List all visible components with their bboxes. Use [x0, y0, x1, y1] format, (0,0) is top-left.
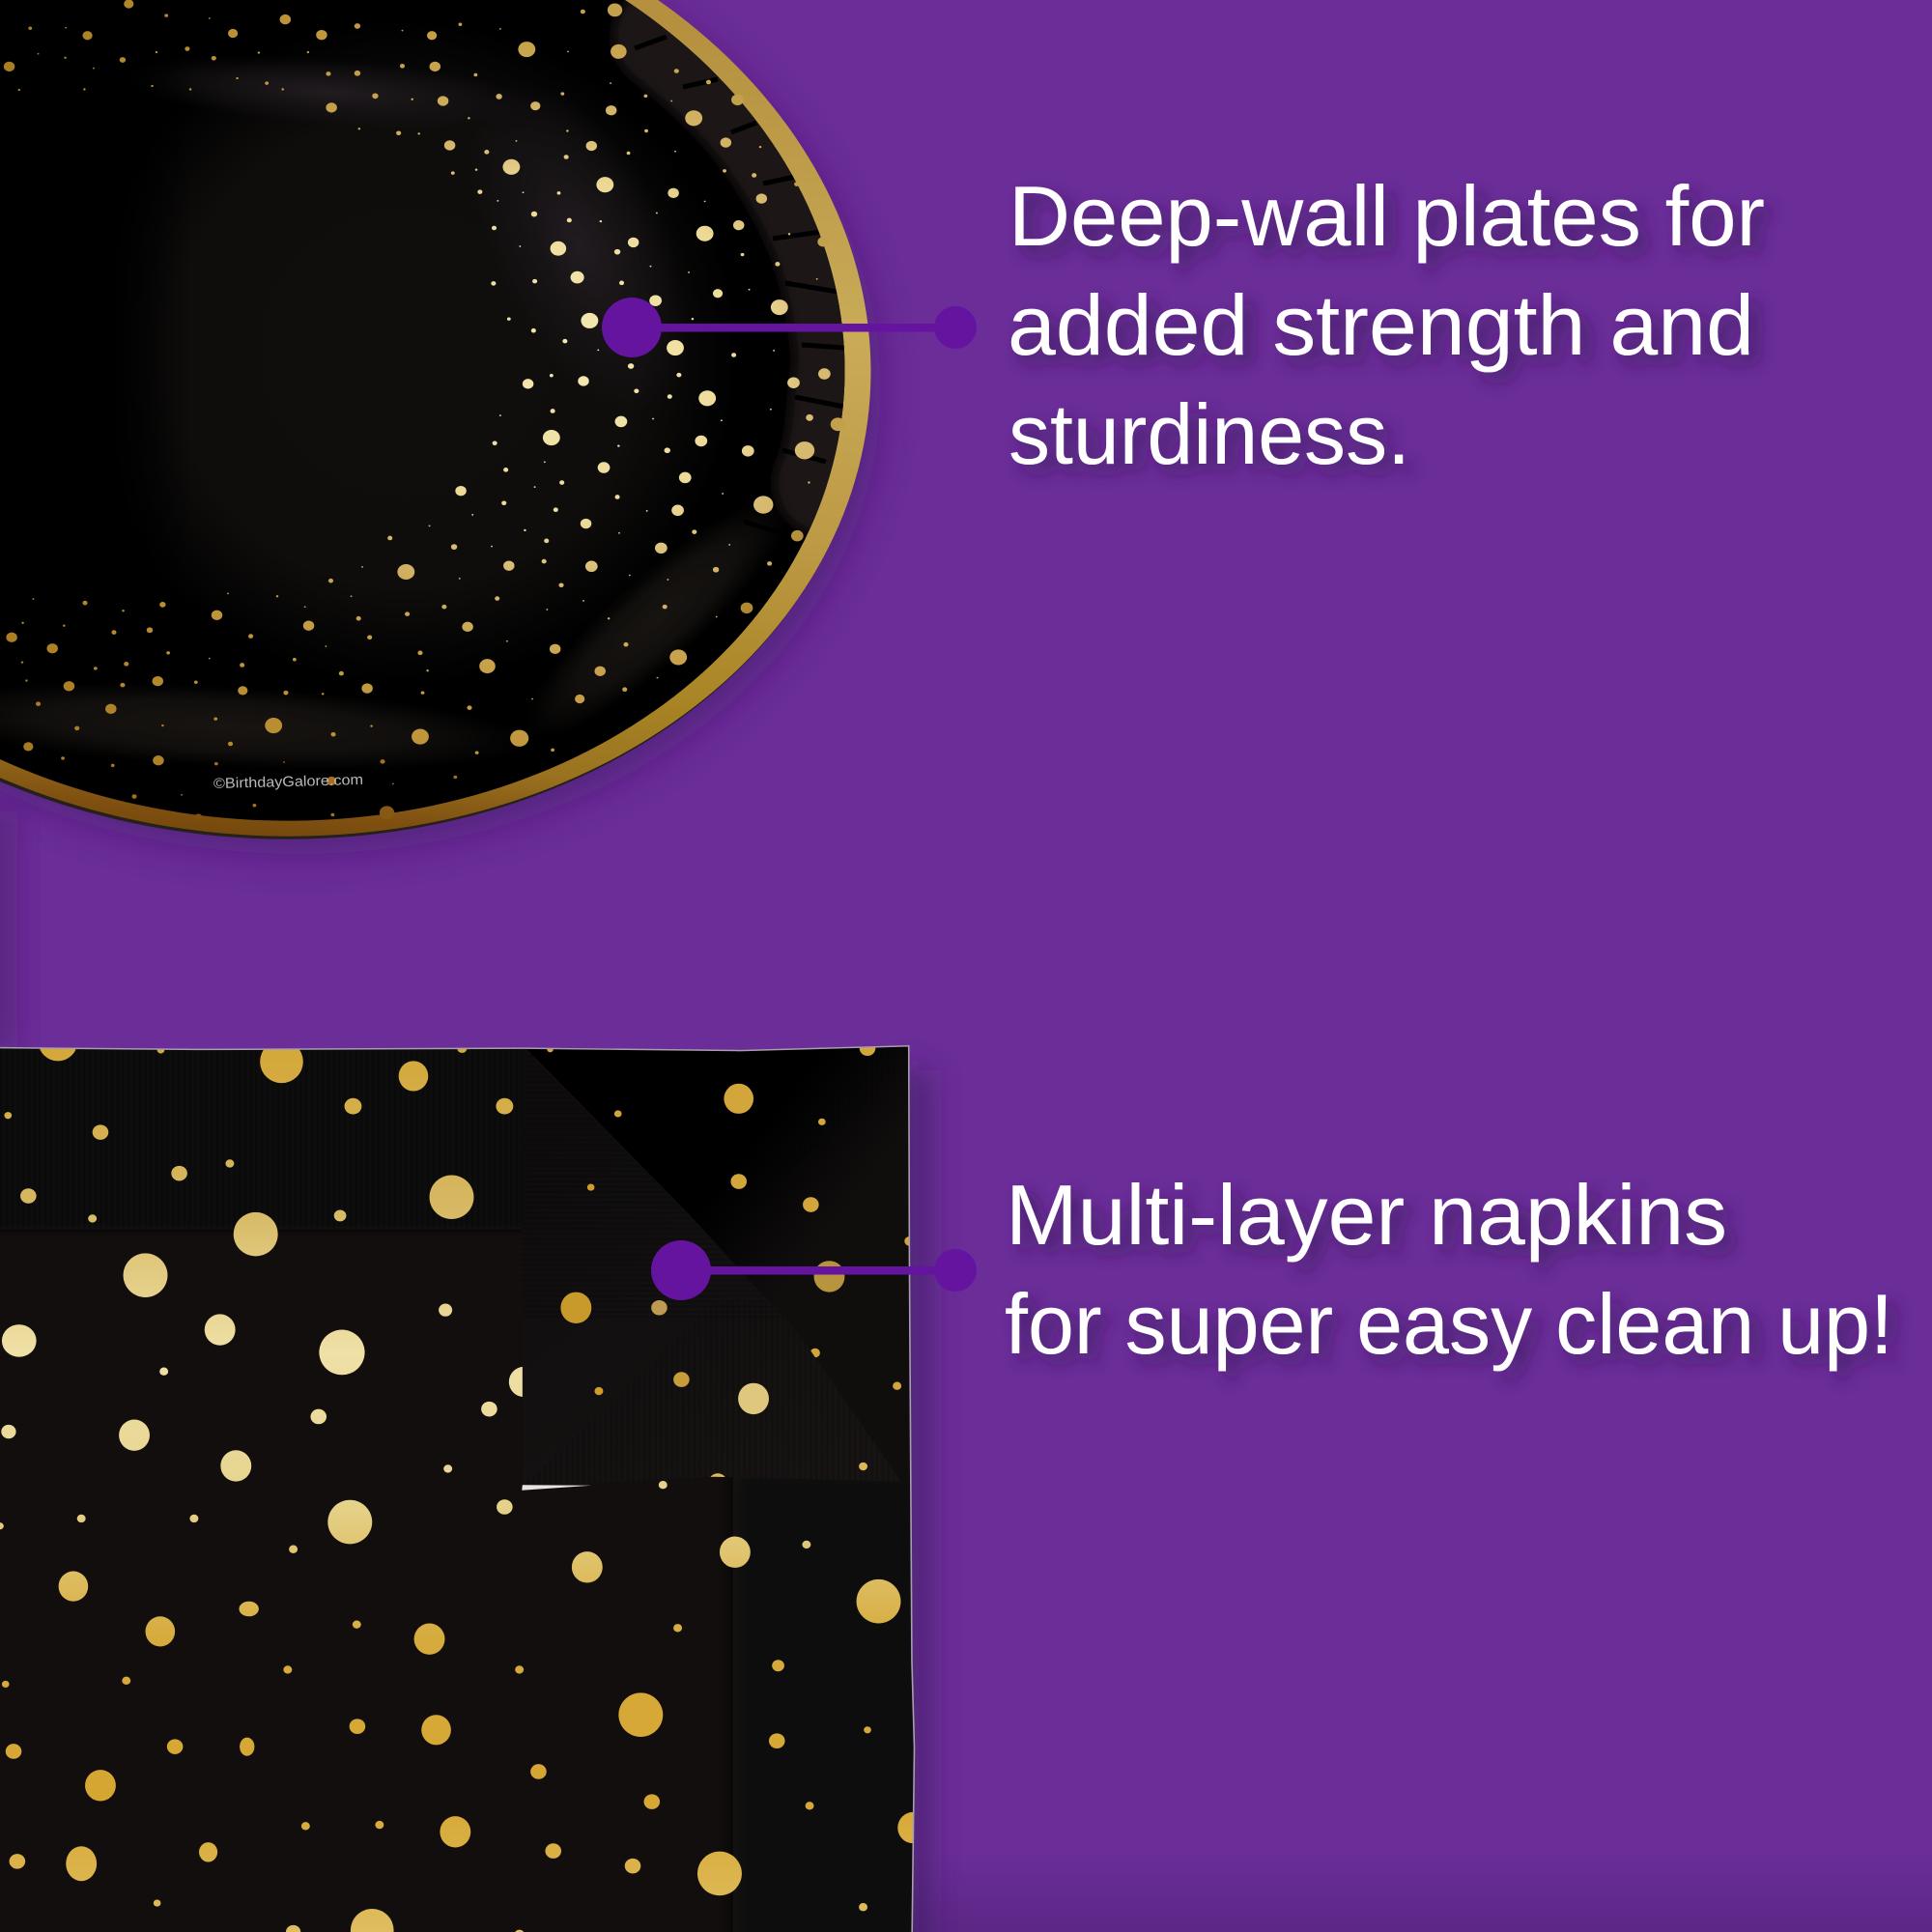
plate underside: [0, 0, 901, 879]
text: plates callout: added strength and: [1008, 277, 1754, 373]
napkin body: [0, 1022, 930, 1932]
connector line: [632, 324, 955, 332]
lower wall band: [0, 692, 471, 761]
text: plates callout: sturdiness.: [1009, 386, 1410, 482]
background left edge shading: [0, 811, 17, 1053]
upper right layer dots: [547, 1040, 914, 1390]
connector line: [681, 1266, 955, 1275]
large connector dot: [602, 298, 662, 357]
napkin: [0, 1022, 930, 1932]
dot below flap: [659, 1481, 668, 1489]
plate shadow: [0, 0, 913, 894]
bowl upper highlight: [176, 64, 465, 112]
plate dots: [4, 0, 831, 816]
background bottom shading: [0, 1855, 1932, 1932]
plate gold dots: [4, 0, 831, 765]
napkin gold dots: [0, 1022, 928, 1932]
text: plates callout: Deep-wall plates for: [1009, 168, 1765, 264]
bottom callout connector: [651, 1240, 977, 1300]
pleat stripes: [0, 1047, 530, 1230]
top callout connector: [602, 298, 977, 357]
pleated top band: [529, 1053, 530, 1055]
deep wall band: [667, 37, 848, 483]
large connector dot: [651, 1240, 711, 1300]
rim bumps: [195, 3, 845, 820]
bowl dark left side: [0, 0, 193, 638]
napkin shadow: [887, 1070, 930, 1932]
text: napkins callout: Multi-layer napkins: [1006, 1167, 1727, 1263]
folded corner flap: [523, 1048, 900, 1486]
text: napkins callout: [1005, 1167, 1893, 1372]
small connector dot: [934, 306, 977, 349]
bowl highlight: [520, 142, 645, 336]
text: napkins callout: for super easy clean up!: [1005, 1276, 1893, 1372]
plate surface: [0, 0, 889, 860]
upper right pleats: [696, 1047, 912, 1198]
lower edge dots: [111, 759, 457, 816]
flap ribbing: [523, 1047, 912, 1490]
plate: [0, 0, 913, 894]
right side darker band: [732, 1486, 733, 1932]
plate bowl: [160, 110, 685, 632]
wall lower right patches: [551, 521, 763, 715]
flap gold dots: [560, 1183, 867, 1490]
upper right napkin layer: [527, 1047, 908, 1266]
napkin edge highlight: [0, 1046, 914, 1932]
wall pleats: [635, 37, 844, 541]
text: plates callout: [1008, 168, 1765, 482]
flap white bottom edge: [522, 1485, 591, 1491]
copyright text: ©BirthdayGalore.com: [213, 772, 363, 792]
gold rim: [0, 0, 903, 876]
small connector dot: [934, 1249, 977, 1292]
